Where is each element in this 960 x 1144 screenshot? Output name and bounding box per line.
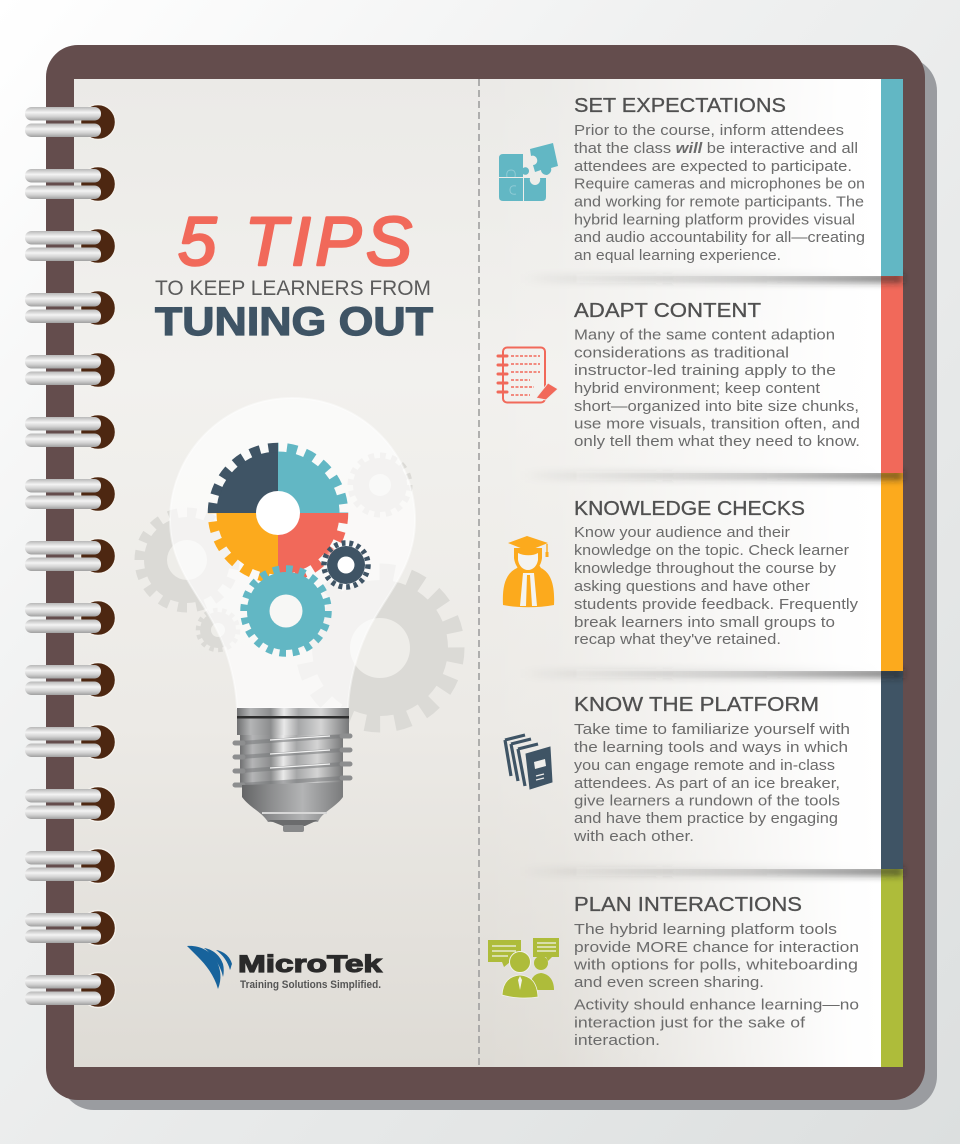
logo: MicroTek — [187, 946, 382, 991]
heading: plan interactions: PLAN INTERACTIONS — [574, 893, 802, 916]
body text: knowledge checks: recap what they've retained. — [574, 632, 781, 648]
body text: know the platform: Take time to familiarize yourself with — [574, 722, 850, 738]
body text: adapt content: considerations as traditional — [574, 346, 789, 362]
panel: plan interactions — [480, 869, 903, 1067]
heading: set expectations: SET EXPECTATIONS — [574, 94, 786, 117]
panel: know the platform — [480, 671, 903, 876]
icon: books — [505, 735, 552, 789]
body text: set expectations: Require cameras and microphones be on — [574, 176, 865, 192]
body text: set expectations: Prior to the course, inform attendees — [574, 123, 844, 139]
body text: knowledge checks: break learners into small groups to — [574, 615, 835, 631]
icon: people talking — [488, 938, 559, 998]
subtitle: to keep learners from: TO KEEP LEARNERS FROM — [155, 277, 431, 300]
body text: knowledge checks: knowledge on the topic. Check learner — [574, 543, 849, 559]
dashed page divider — [478, 79, 480, 1067]
body text: knowledge checks: Know your audience and their — [574, 525, 790, 541]
icon: notebook and pen — [498, 348, 558, 402]
body text: know the platform — [573, 722, 850, 845]
panel: knowledge checks — [480, 473, 903, 678]
logo tagline: Training Solutions Simplified. — [240, 979, 381, 991]
logo wordmark: MicroTek — [238, 951, 382, 978]
icon: graduate — [503, 536, 554, 607]
title: 5 tips: 5 TIPS — [178, 203, 412, 280]
body text: plan interactions: The hybrid learning platform tools — [574, 922, 837, 938]
body text: set expectations: an equal learning experience. — [574, 248, 781, 264]
panel: adapt content — [480, 276, 903, 480]
body text: plan interactions: and even screen sharing. — [574, 975, 764, 991]
body text: adapt content: only tell them what they need to know. — [574, 434, 860, 450]
heading: know the platform: KNOW THE PLATFORM — [574, 693, 819, 716]
subtitle: tuning out: TUNING OUT — [155, 300, 433, 344]
body text: know the platform: attendees. As part of an ice breaker, — [574, 776, 840, 792]
large quartered gear — [212, 448, 344, 578]
small dark gear — [324, 543, 368, 587]
body text: know the platform: you can engage remote and in-class — [574, 758, 835, 774]
body text: set expectations: that the class will be interactive and all — [574, 141, 858, 157]
body text: plan interactions — [573, 922, 859, 1049]
body text: plan interactions: interaction. — [574, 1033, 660, 1049]
body text: adapt content: hybrid environment; keep content — [574, 381, 820, 397]
body text: knowledge checks: students provide feedback. Frequently — [574, 597, 859, 613]
body text: set expectations — [574, 123, 865, 264]
body text: set expectations: hybrid learning platform provides visual — [574, 212, 855, 228]
illustration: light bulb with gears — [140, 398, 456, 832]
body text: set expectations: and working for remote participants. The — [574, 194, 864, 210]
body text: adapt content: use more visuals, transition often, and — [574, 416, 860, 432]
spiral binding rings — [25, 104, 116, 1008]
body text: knowledge checks — [574, 525, 859, 648]
body text: know the platform: and have them practice by engaging — [574, 811, 838, 827]
panel: set expectations — [480, 79, 903, 283]
icon: puzzle pieces — [499, 143, 558, 201]
heading: knowledge checks: KNOWLEDGE CHECKS — [574, 497, 805, 520]
body text: plan interactions: interaction just for the sake of — [574, 1016, 806, 1032]
body text: adapt content: instructor-led training apply to the — [574, 363, 836, 379]
heading: adapt content: ADAPT CONTENT — [574, 299, 762, 322]
body text: set expectations: attendees are expected to participate. — [574, 159, 852, 175]
body text: set expectations: and audio accountability for all—creating — [574, 230, 865, 246]
body text: plan interactions: Activity should enhance learning—no — [574, 998, 859, 1014]
body text: know the platform: with each other. — [573, 829, 694, 845]
body text: adapt content: short—organized into bite size chunks, — [574, 399, 859, 415]
logo swoosh mark — [187, 946, 232, 989]
body text: know the platform: give learners a rundown of the tools — [574, 794, 840, 810]
body text: plan interactions: provide MORE chance for interaction — [574, 940, 859, 956]
body text: knowledge checks: asking questions and have other — [574, 579, 810, 595]
teal gear — [244, 569, 328, 653]
body text: know the platform: the learning tools and ways in which — [574, 740, 848, 756]
left page title — [155, 203, 433, 344]
body text: knowledge checks: knowledge throughout the course by — [574, 561, 837, 577]
glass bulb — [170, 398, 415, 708]
body text: plan interactions: with options for polls, whiteboarding — [573, 958, 858, 974]
faint background gears — [140, 456, 456, 724]
body text: adapt content — [574, 328, 860, 450]
body text: adapt content: Many of the same content adaption — [574, 328, 835, 344]
bulb metal base — [235, 708, 350, 832]
